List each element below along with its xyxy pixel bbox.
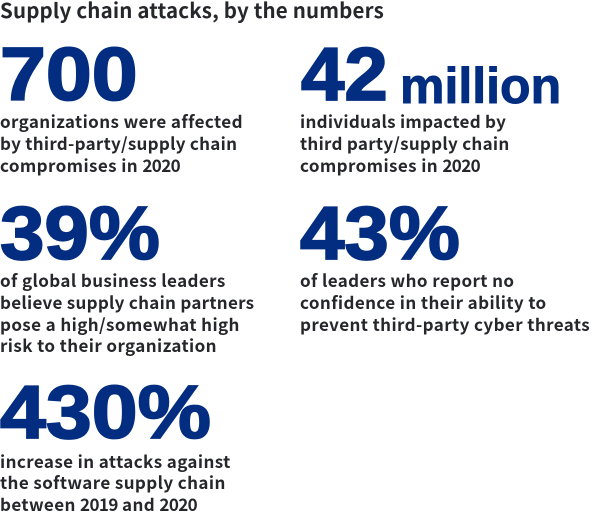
unit: million: million bbox=[400, 58, 561, 114]
stat: 430% increase bbox=[0, 370, 231, 516]
description: 39%: believe supply chain partners bbox=[0, 289, 254, 314]
description: organizations: compromises in 2020 bbox=[0, 152, 180, 177]
number: 42: 42 bbox=[301, 32, 388, 116]
description: individuals: compromises in 2020 bbox=[300, 152, 480, 177]
stat: 39% of leaders bbox=[0, 191, 254, 357]
description: individuals: third party/supply chain bbox=[300, 130, 510, 155]
description: organizations: organizations were affected bbox=[0, 108, 243, 133]
stat: 43% of leaders bbox=[300, 191, 590, 336]
description: 430%: increase in attacks against bbox=[0, 448, 231, 473]
stat: 42 million individuals bbox=[300, 32, 561, 177]
description: 39%: pose a high/somewhat high bbox=[0, 311, 240, 336]
description: organizations: by third-party/supply chain bbox=[0, 130, 237, 155]
description: 430%: the software supply chain bbox=[0, 469, 226, 494]
description: 39% bbox=[0, 267, 254, 357]
description: 43%: of leaders who report no bbox=[300, 267, 514, 292]
number: 43%: 43% bbox=[300, 191, 460, 275]
description: 430% bbox=[0, 448, 231, 516]
description: individuals bbox=[300, 108, 510, 177]
description: organizations bbox=[0, 108, 243, 177]
description: 43% bbox=[300, 267, 590, 336]
description: 39%: of global business leaders bbox=[0, 267, 226, 292]
description: 39%: risk to their organization bbox=[0, 332, 217, 357]
description: individuals: individuals impacted by bbox=[300, 108, 506, 133]
number: 700: 700 bbox=[0, 32, 138, 116]
number: 430%: 430% bbox=[0, 370, 211, 454]
description: 43%: confidence in their ability to bbox=[300, 289, 547, 314]
number: 39%: 39% bbox=[0, 191, 160, 275]
description: 43%: prevent third-party cyber threats bbox=[300, 311, 590, 336]
stat: 700 organizations bbox=[0, 32, 243, 177]
description: 430%: between 2019 and 2020 bbox=[0, 491, 197, 516]
